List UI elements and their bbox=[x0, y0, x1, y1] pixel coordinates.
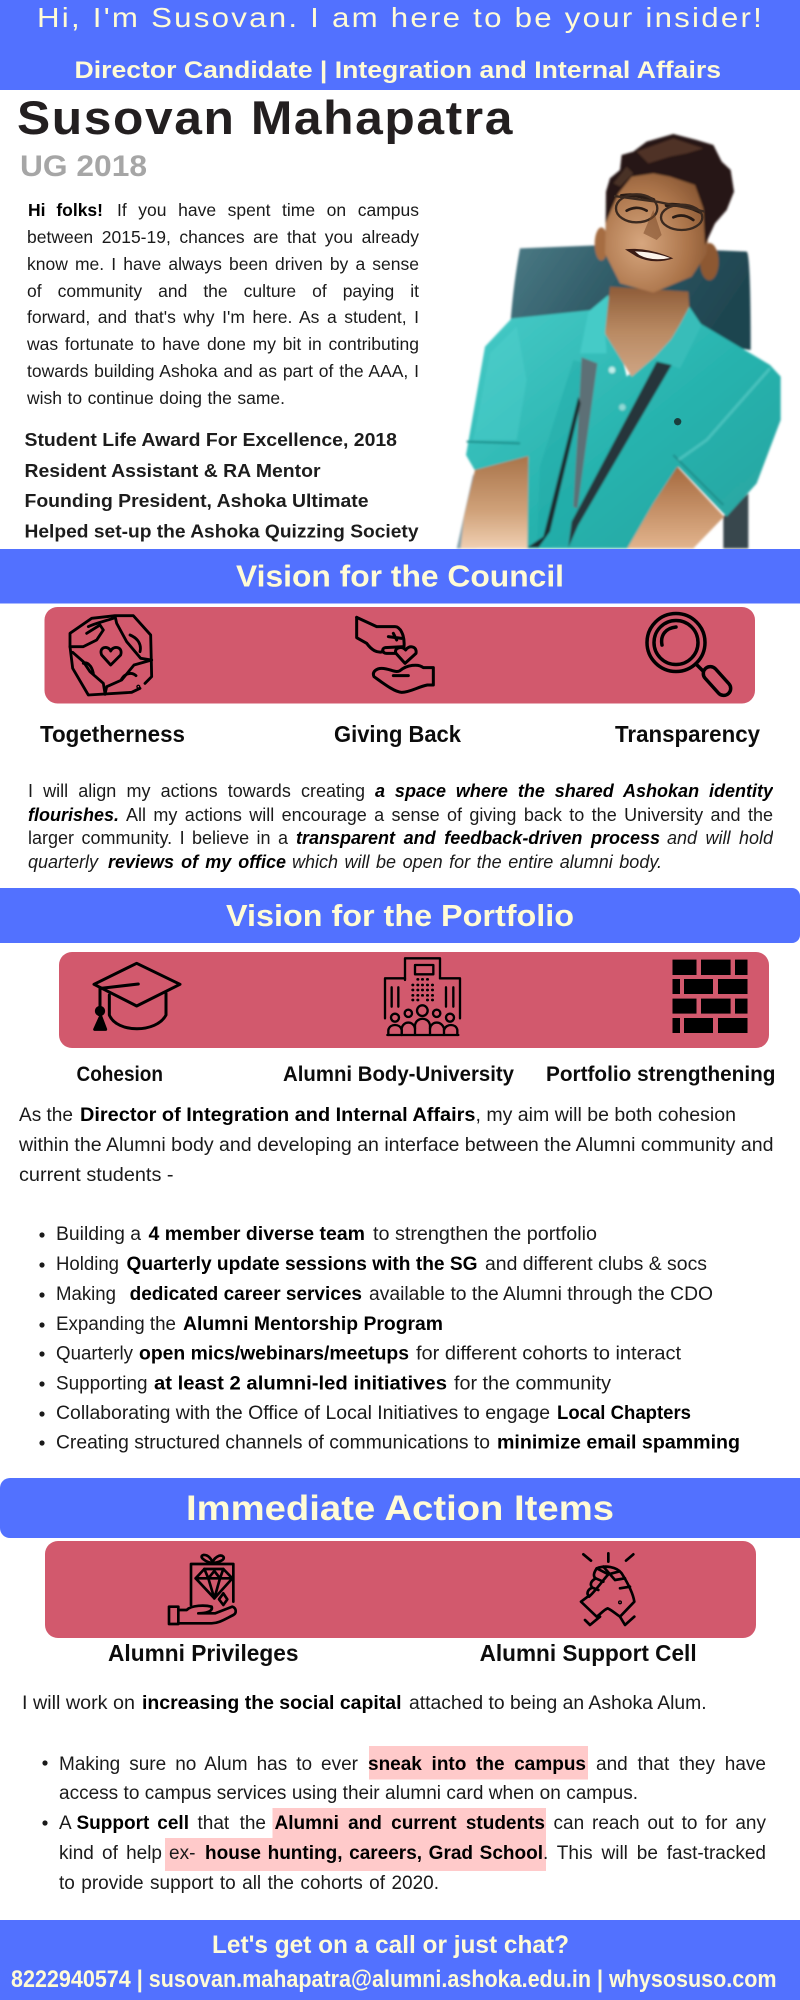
council vision paragraph: larger community. I believe in a bbox=[28, 828, 288, 848]
intro paragraph: was fortunate to have done my bit in contributing bbox=[27, 334, 419, 354]
intro paragraph: of community and the culture of paying it bbox=[27, 281, 419, 301]
intro paragraph: If you have spent time on campus bbox=[117, 200, 419, 220]
portfolio vision paragraph: current students - bbox=[19, 1165, 174, 1186]
council vision paragraph: I will align my actions towards creating bbox=[28, 781, 365, 801]
nose shadow bbox=[643, 210, 662, 240]
portfolio action bullets: to strengthen the portfolio bbox=[373, 1224, 597, 1245]
council vision paragraph: flourishes. bbox=[28, 805, 119, 825]
council icon labels: Togetherness bbox=[40, 721, 185, 747]
chair back bbox=[511, 245, 751, 350]
shirt logo bbox=[674, 418, 681, 425]
icon: togetherness bbox=[70, 616, 152, 695]
icon: magnifier bbox=[647, 614, 734, 698]
panel: portfolio icons bbox=[59, 952, 769, 1048]
icon: giving back bbox=[357, 617, 433, 692]
footer band bbox=[0, 1920, 800, 2000]
achievements list: Founding President, Ashoka Ultimate bbox=[24, 490, 368, 511]
portfolio action bullets: 4 member diverse team bbox=[148, 1224, 365, 1245]
council vision paragraph bbox=[28, 778, 773, 873]
portfolio action bullets: Supporting bbox=[56, 1373, 148, 1394]
council vision paragraph: quarterly bbox=[28, 852, 98, 872]
council vision paragraph: All my actions will encourage a sense of giving back to the University and the bbox=[126, 805, 773, 825]
hair bbox=[606, 134, 734, 245]
action item bullet text: to provide support to all the cohorts of 2020. bbox=[59, 1873, 439, 1894]
portfolio action bullets: minimize email spamming bbox=[497, 1432, 740, 1453]
icon: alumni support clasped hands bbox=[581, 1553, 634, 1625]
action item bullet text: . This will be fast-tracked bbox=[543, 1843, 766, 1864]
council icon labels bbox=[40, 721, 760, 747]
glasses bbox=[614, 194, 705, 230]
intro paragraph: between 2015-19, chances are that you already bbox=[27, 227, 419, 247]
action item bullet text: ex- bbox=[169, 1843, 195, 1864]
icon: brick wall bbox=[672, 960, 748, 1033]
section band: immediate action items bbox=[0, 1478, 800, 1538]
ears bbox=[595, 227, 608, 261]
portfolio action bullets: dedicated career services bbox=[130, 1284, 362, 1305]
action item bullet text: access to campus services using their alumni card when on campus. bbox=[59, 1783, 638, 1804]
dark lanyard bbox=[568, 362, 672, 547]
chair lower bbox=[457, 473, 477, 548]
grey lanyard bbox=[573, 357, 597, 508]
action item bullet text: Making sure no Alum has to ever bbox=[59, 1754, 358, 1775]
portfolio action bullets: open mics/webinars/meetups bbox=[139, 1343, 409, 1364]
intro paragraph: forward, and that's why I'm here. As a student, I bbox=[27, 307, 419, 327]
intro paragraph: Hi folks! bbox=[28, 200, 103, 220]
portfolio action bullets: available to the Alumni through the CDO bbox=[369, 1284, 713, 1305]
portfolio action bullets: Alumni Mentorship Program bbox=[183, 1314, 443, 1335]
portrait photo bbox=[457, 134, 781, 548]
portfolio action bullets: at least 2 alumni-led initiatives bbox=[154, 1373, 447, 1394]
portfolio action bullets: Quarterly bbox=[56, 1343, 133, 1364]
section band: vision for the portfolio bbox=[0, 888, 800, 943]
action item bullet text: Support cell bbox=[76, 1813, 189, 1834]
icon: alumni privileges gem gift bbox=[169, 1555, 236, 1624]
achievements list: Resident Assistant & RA Mentor bbox=[24, 460, 320, 481]
action item bullet text: kind of help bbox=[59, 1843, 162, 1864]
section band: vision for the council: Vision for the Council bbox=[236, 558, 564, 594]
action item bullet text bbox=[58, 1750, 767, 1897]
text highlights bbox=[165, 1746, 588, 1871]
shirt bbox=[466, 295, 781, 548]
action item bullets bbox=[42, 1750, 767, 1897]
council icon labels: Transparency bbox=[615, 721, 760, 747]
portfolio action bullets bbox=[39, 1224, 740, 1453]
candidate name: Susovan Mahapatra bbox=[17, 91, 514, 144]
portfolio action bullets: Expanding the bbox=[56, 1314, 176, 1335]
portfolio action bullets: for the community bbox=[454, 1373, 612, 1394]
shirt buttons bbox=[609, 367, 615, 373]
right forearm bbox=[627, 467, 724, 548]
intro paragraph: towards building Ashoka and as part of the AAA, I bbox=[27, 361, 419, 381]
portfolio action bullets: Quarterly update sessions with the SG bbox=[126, 1254, 478, 1275]
neck bbox=[605, 287, 689, 377]
portfolio action bullets: for different cohorts to interact bbox=[416, 1343, 682, 1364]
action item bullet text: A bbox=[59, 1813, 72, 1834]
left forearm bbox=[461, 456, 528, 548]
header role: Director Candidate | Integration and Internal Affairs bbox=[74, 57, 721, 84]
action item icon labels bbox=[108, 1640, 697, 1666]
panel: action item icons bbox=[45, 1541, 756, 1638]
portfolio action bullets: Local Chapters bbox=[557, 1403, 691, 1424]
torso shadow bbox=[537, 360, 597, 547]
social capital sentence: I will work on bbox=[22, 1693, 135, 1714]
achievements list: Helped set-up the Ashoka Quizzing Society bbox=[24, 520, 419, 542]
action item icon labels: Alumni Support Cell bbox=[480, 1640, 697, 1666]
action item bullet text: and that they have bbox=[596, 1754, 766, 1775]
collars bbox=[580, 295, 608, 353]
portfolio action bullets: Holding bbox=[56, 1254, 119, 1275]
header greeting: Hi, I'm Susovan. I am here to be your insider! bbox=[37, 2, 764, 33]
portfolio action bullets: Collaborating with the Office of Local Initiatives to engage bbox=[56, 1403, 550, 1424]
intro paragraph bbox=[27, 196, 419, 412]
sleeve highlight bbox=[473, 327, 527, 440]
portfolio vision paragraph: , my aim will be both cohesion bbox=[476, 1105, 736, 1126]
achievements list bbox=[24, 429, 419, 542]
footer prompt: Let's get on a call or just chat? bbox=[212, 1931, 569, 1959]
portfolio icon labels bbox=[76, 1062, 776, 1086]
achievements list: Student Life Award For Excellence, 2018 bbox=[24, 429, 397, 450]
mouth bbox=[625, 249, 673, 261]
portfolio action bullets: and different clubs & socs bbox=[485, 1254, 707, 1275]
council vision paragraph: a space where the shared Ashokan identity bbox=[375, 781, 773, 801]
action item bullet text: that the bbox=[198, 1813, 266, 1834]
council vision paragraph: and will hold bbox=[667, 828, 773, 848]
portfolio icon labels: Portfolio strengthening bbox=[546, 1062, 776, 1086]
cohort label: UG 2018 bbox=[20, 150, 147, 183]
social capital sentence: attached to being an Ashoka Alum. bbox=[409, 1693, 707, 1714]
section band: immediate action items: Immediate Action Items bbox=[186, 1489, 614, 1528]
council vision paragraph: transparent and feedback-driven process bbox=[296, 828, 660, 848]
portfolio vision paragraph: Director of Integration and Internal Affairs bbox=[80, 1105, 476, 1126]
portfolio action bullets: Making bbox=[56, 1284, 116, 1305]
action item bullet text: sneak into the campus bbox=[368, 1754, 586, 1775]
intro paragraph: wish to continue doing the same. bbox=[27, 388, 285, 408]
face bbox=[605, 170, 710, 293]
action item bullet text: Alumni and current students bbox=[274, 1813, 545, 1834]
intro paragraph: know me. I have always been driven by a sense bbox=[27, 254, 419, 274]
council vision paragraph: reviews of my office bbox=[108, 852, 286, 872]
portfolio icon labels: Alumni Body-University bbox=[283, 1062, 514, 1086]
portfolio vision paragraph bbox=[18, 1105, 774, 1186]
action item bullet text: can reach out to for any bbox=[554, 1813, 766, 1834]
icon: graduation cap bbox=[94, 963, 180, 1029]
portfolio vision paragraph: As the bbox=[19, 1105, 73, 1126]
header band bbox=[0, 0, 800, 90]
action item bullet text: house hunting, careers, Grad School bbox=[205, 1843, 543, 1864]
social capital sentence bbox=[22, 1693, 707, 1714]
council icon labels: Giving Back bbox=[334, 721, 462, 747]
section band: vision for the portfolio: Vision for the Portfolio bbox=[226, 898, 574, 933]
portfolio action bullets: Building a bbox=[56, 1224, 141, 1245]
portfolio icon labels: Cohesion bbox=[76, 1062, 163, 1086]
eyebrows and eyes bbox=[622, 195, 700, 220]
panel: council icons bbox=[44, 607, 755, 704]
portfolio vision paragraph: within the Alumni body and developing an interface between the Alumni community and bbox=[18, 1135, 774, 1156]
icon: campus building with people bbox=[385, 958, 460, 1035]
portfolio action bullets: Creating structured channels of communications to bbox=[56, 1432, 490, 1453]
sleeve hems bbox=[467, 442, 520, 443]
section band: vision for the council bbox=[0, 549, 800, 604]
council vision paragraph: which will be open for the entire alumni body. bbox=[292, 852, 662, 872]
social capital sentence: increasing the social capital bbox=[142, 1693, 402, 1714]
action item icon labels: Alumni Privileges bbox=[108, 1640, 298, 1666]
